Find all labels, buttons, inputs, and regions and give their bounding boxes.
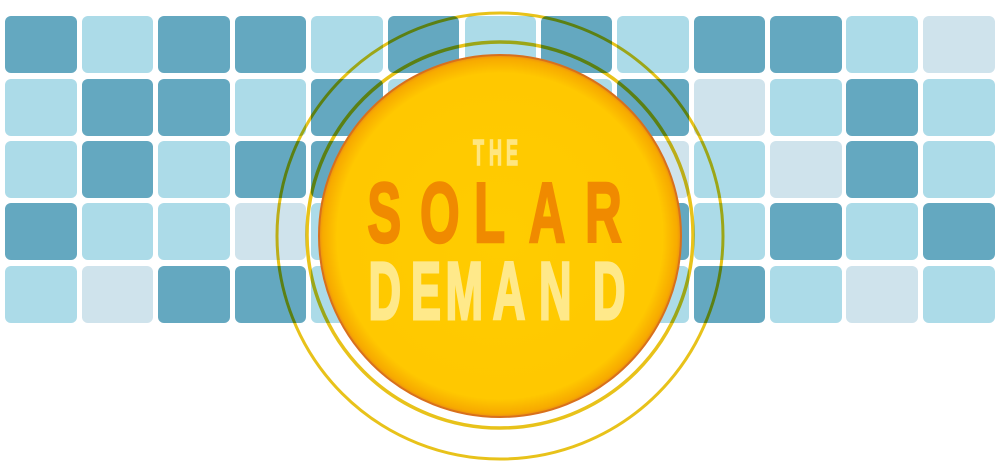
inner ring xyxy=(307,42,693,428)
row 5 xyxy=(5,266,995,323)
row 4 xyxy=(5,203,995,260)
row 1 xyxy=(5,16,995,73)
tile grid background xyxy=(5,16,995,323)
title: THE: THE xyxy=(473,133,518,174)
title text xyxy=(367,133,625,338)
outer ring xyxy=(277,13,723,459)
sun disc xyxy=(319,55,681,417)
title: SOLAR: SOLAR xyxy=(367,166,622,260)
row 3 xyxy=(5,141,995,198)
row 2 xyxy=(5,79,995,136)
title: DEMAND: DEMAND xyxy=(369,246,625,338)
